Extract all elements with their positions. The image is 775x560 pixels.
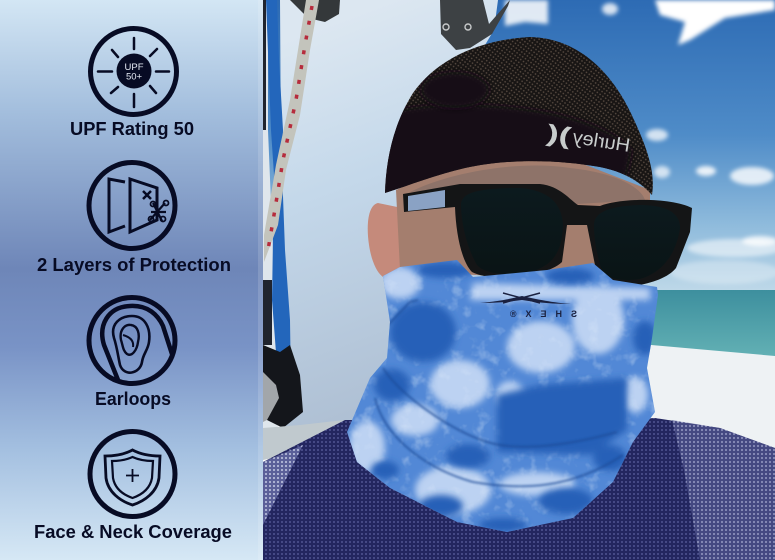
feature: 2 Layers of Protection (37, 162, 231, 275)
feature: Earloops (89, 298, 175, 409)
tie-dye mottling (340, 255, 665, 535)
sunglasses (403, 184, 692, 286)
left feature panel background (0, 0, 263, 560)
gaiter brand logo (480, 293, 577, 319)
boat deck (640, 344, 775, 452)
label: 2 Layers of Protection (37, 255, 231, 275)
clouds (505, 0, 775, 284)
sky (263, 0, 775, 300)
dark mast edge at far left (263, 0, 272, 345)
icon: shield with plus (90, 432, 175, 516)
right lens (594, 205, 680, 280)
photo: man wearing neck gaiter on a boat (263, 0, 775, 560)
label: Face & Neck Coverage (34, 522, 232, 542)
icon: sun with UPF 50+ badge: 50+ (126, 72, 143, 82)
hat logo, mirrored: )( (545, 120, 573, 150)
ear (368, 203, 402, 279)
hat logo, mirrored: Hurley (570, 127, 632, 157)
label: UPF Rating 50 (70, 119, 194, 139)
sea (650, 290, 775, 356)
label: Earloops (95, 389, 171, 409)
left lens (461, 188, 563, 274)
lighter shirt panel at right (672, 420, 775, 560)
forehead shade (410, 165, 645, 205)
icon: sun with UPF 50+ badge (90, 28, 176, 114)
icon: ear with loop (89, 298, 175, 384)
feature: Face & Neck Coverage (34, 432, 232, 542)
blue rope (266, 0, 290, 352)
face skin (396, 161, 650, 276)
gaiter brand logo: SHEX® (501, 309, 577, 319)
shirt (263, 418, 775, 560)
icon: two fabric layers with airflow symbols (89, 162, 175, 248)
top rigging hardware (290, 0, 510, 50)
hat logo, mirrored (545, 124, 630, 152)
lighter shirt panel at left (263, 445, 303, 525)
neck gaiter (340, 255, 665, 535)
sail (280, 0, 498, 452)
knit hat (380, 37, 653, 200)
feature: UPF Rating 50 (70, 28, 194, 139)
grey rope with red flecks (264, 0, 319, 262)
thin lighter seam at panel edge (258, 0, 263, 560)
dark rigging at lower left (263, 345, 345, 460)
icon: sun with UPF 50+ badge: UPF (124, 62, 144, 73)
strip left of the ropes (263, 0, 278, 440)
